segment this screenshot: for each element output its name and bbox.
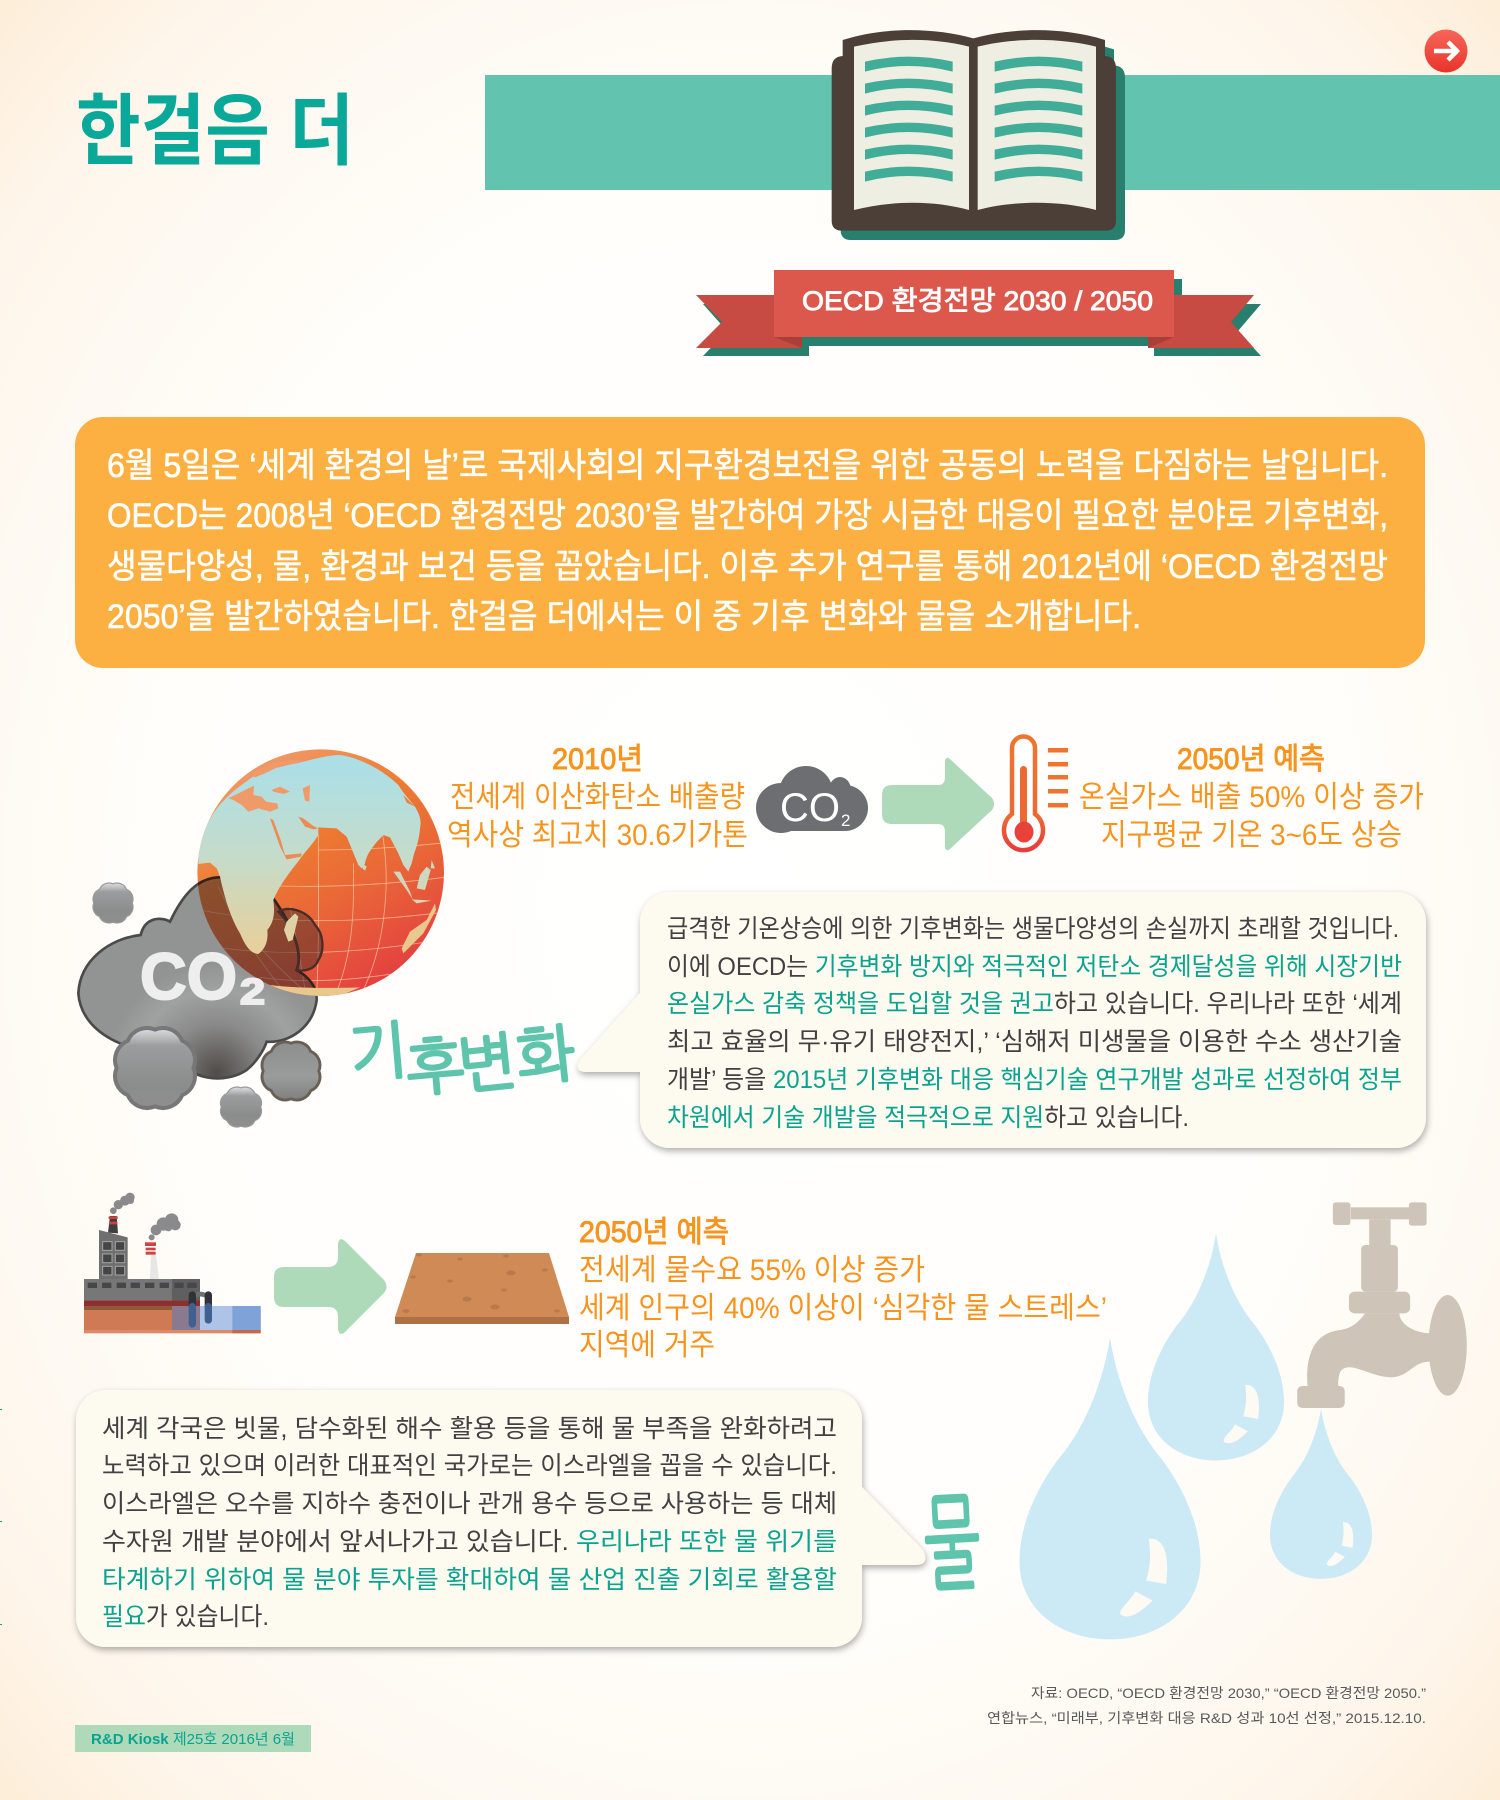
intro text: 생물다양성, 물, 환경과 보건 등을 꼽았습니다. 이후 추가 연구를 통해 2012년에 ‘OECD 환경전망: [107, 548, 1388, 586]
header band: [485, 75, 1500, 190]
callout: water: [76, 1390, 925, 1647]
arrow: [274, 1239, 386, 1334]
panel: introduction: [75, 417, 1425, 668]
ribbon banner: [696, 270, 1261, 356]
CO2 label: CO: [140, 939, 237, 1013]
ocean and graticule: [197, 749, 445, 997]
text: 2050 water forecast: 2050년 예측: [579, 1216, 729, 1249]
water body text: 필요가 있습니다.: [102, 1603, 269, 1631]
water body text: 수자원 개발 분야에서 앞서나가고 있습니다. 우리나라 또한 물 위기를: [102, 1528, 837, 1556]
icon: water tap: [1297, 1202, 1467, 1408]
water body text: 세계 각국은 빗물, 담수화된 해수 활용 등을 통해 물 부족을 완화하려고: [102, 1415, 837, 1443]
handwritten heading: climate change: 기후변화: [346, 1016, 578, 1105]
icon: CO2 cloud: CO: [780, 786, 840, 830]
text: 2050 forecast: 지구평균 기온 3~6도 상승: [1101, 819, 1402, 852]
water body text: [102, 1415, 837, 1631]
climate change body text: 온실가스 감축 정책을 도입할 것을 권고하고 있습니다. 우리나라 또한 ‘세계: [667, 990, 1402, 1018]
text: 2050 water forecast: 세계 인구의 40% 이상이 ‘심각한 물 스트레스’: [579, 1292, 1107, 1325]
climate change body text: 개발’ 등을 2015년 기후변화 대응 핵심기술 연구개발 성과로 선정하여 정부: [667, 1066, 1402, 1094]
CO2 label: 2: [240, 971, 265, 1012]
text: 2010 emissions: 전세계 이산화탄소 배출량: [450, 781, 745, 814]
handwritten heading: water: 물: [921, 1486, 983, 1603]
callout: climate change: [578, 892, 1426, 1148]
cloud seen through globe: [198, 876, 324, 996]
water body text: 이스라엘은 오수를 지하수 충전이나 관개 용수 등으로 사용하는 등 대체: [102, 1490, 837, 1518]
large CO2 cloud: [78, 877, 317, 1078]
icon: open book: [832, 30, 1125, 240]
icon: factory: [84, 1193, 261, 1333]
water body text: 타계하기 위하여 물 분야 투자를 확대하여 물 산업 진출 기회로 활용할: [102, 1566, 837, 1594]
text: 2050 water forecast: 지역에 거주: [579, 1329, 715, 1362]
source note: [987, 1685, 1426, 1726]
smoke clouds: [93, 883, 320, 1127]
text: 2050 forecast: 2050년 예측: [1177, 743, 1325, 776]
climate change body text: [667, 915, 1402, 1132]
ribbon title: OECD 환경전망 2030 / 2050: [802, 286, 1153, 316]
icon: CO2 cloud: [756, 766, 868, 833]
climate change body text: 차원에서 기술 개발을 적극적으로 지원하고 있습니다.: [667, 1104, 1189, 1132]
intro text: 6월 5일은 ‘세계 환경의 날’로 국제사회의 지구환경보전을 위한 공동의 노력을 다짐하는 날입니다.: [107, 447, 1388, 485]
source note: 자료: OECD, “OECD 환경전망 2030,” “OECD 환경전망 2050.”: [1031, 1685, 1426, 1701]
icon: CO2 cloud: 2: [841, 811, 850, 830]
text: 2050 water forecast: [579, 1216, 1107, 1362]
climate change body text: 급격한 기온상승에 의한 기후변화는 생물다양성의 손실까지 초래할 것입니다.: [667, 915, 1399, 943]
icon: water drops: [1020, 1234, 1372, 1639]
land and seas: [198, 755, 436, 997]
globe: [197, 749, 444, 996]
text: 2050 forecast: [1079, 743, 1424, 852]
issue badge: [75, 1725, 311, 1752]
climate change body text: 최고 효율의 무·유기 태양전지,’ ‘심해저 미생물을 이용한 수소 생산기술: [667, 1028, 1402, 1056]
icon: next arrow button: [1424, 30, 1468, 72]
issue badge: R&D Kiosk 제25호 2016년 6월: [91, 1731, 295, 1748]
text: 2050 forecast: 온실가스 배출 50% 이상 증가: [1079, 781, 1424, 814]
icon: parched soil: [395, 1253, 569, 1324]
title: 한걸음 더: [76, 87, 354, 175]
text: 2010 emissions: 2010년: [552, 743, 643, 776]
icon: thermometer: [1004, 736, 1068, 850]
text: 2050 water forecast: 전세계 물수요 55% 이상 증가: [579, 1254, 925, 1287]
illustration: CO2 cloud and globe: [78, 749, 445, 1127]
climate change body text: 이에 OECD는 기후변화 방지와 적극적인 저탄소 경제달성을 위해 시장기반: [667, 953, 1402, 981]
intro text: OECD는 2008년 ‘OECD 환경전망 2030’을 발간하여 가장 시급한 대응이 필요한 분야로 기후변화,: [107, 497, 1388, 535]
text: 2010 emissions: 역사상 최고치 30.6기가톤: [447, 819, 748, 852]
text: 2010 emissions: [447, 743, 748, 852]
intro text: [107, 447, 1388, 636]
intro text: 2050’을 발간하였습니다. 한걸음 더에서는 이 중 기후 변화와 물을 소개합니다.: [107, 598, 1141, 636]
source note: 연합뉴스, “미래부, 기후변화 대응 R&D 성과 10선 선정,” 2015.12.10.: [987, 1710, 1426, 1726]
water body text: 노력하고 있으며 이러한 대표적인 국가로는 이스라엘을 꼽을 수 있습니다.: [102, 1452, 837, 1480]
arrow: [882, 758, 994, 850]
